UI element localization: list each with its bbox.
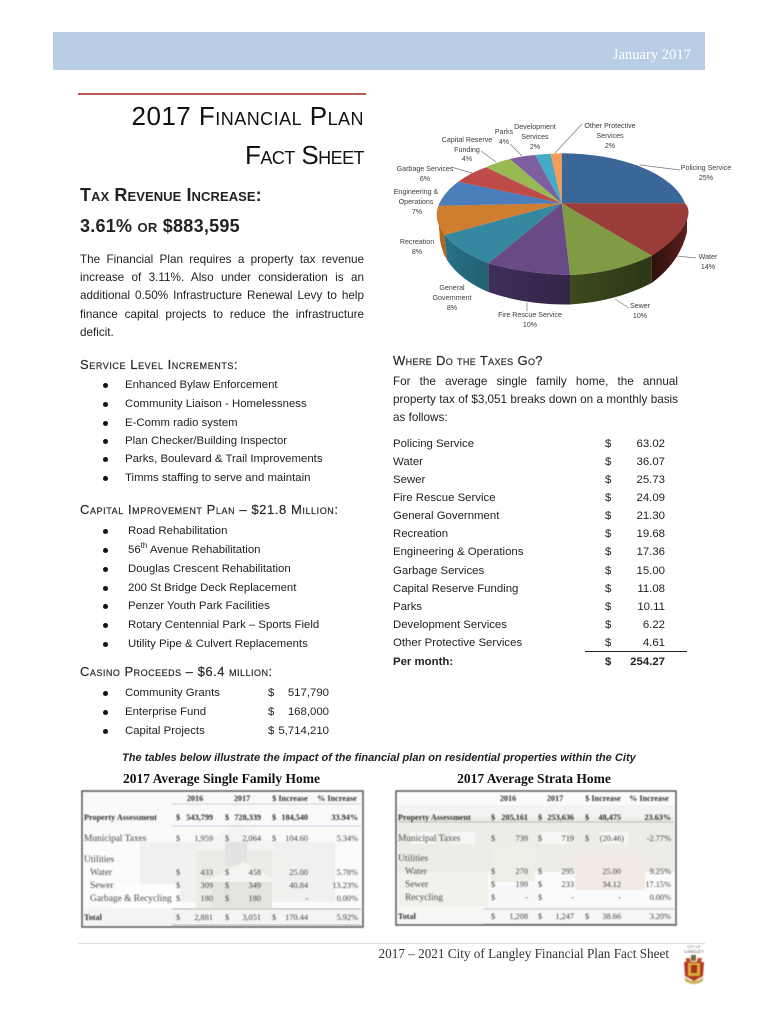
section: capital improvement plan <box>80 502 339 650</box>
table values: $ <box>491 893 495 902</box>
table values: 295 <box>562 867 574 876</box>
paragraph: financial plan: finance capital projects to reduce the infrastructure <box>80 308 364 321</box>
chart labels: 6% <box>420 175 431 183</box>
table values: 2017 <box>547 794 563 803</box>
table values: $ <box>538 867 542 876</box>
table values: 9.25% <box>650 867 671 876</box>
table values: 349 <box>249 881 261 890</box>
table values: 33.94% <box>331 813 358 822</box>
icon: city of langley crest <box>683 945 705 985</box>
table: strata home <box>394 790 678 926</box>
table values: 34.12 <box>602 880 621 889</box>
tax breakdown table: 17.36 <box>636 546 665 558</box>
table values: $ <box>585 813 589 822</box>
chart labels: Sewer <box>630 302 651 310</box>
tax breakdown table: Engineering & Operations <box>393 546 523 558</box>
slice: garbage <box>458 167 562 203</box>
chart labels: 4% <box>462 155 473 163</box>
tax breakdown table: Policing Service <box>393 438 474 450</box>
chart labels: Water <box>699 253 718 261</box>
table values: $ <box>272 834 276 843</box>
tax breakdown table: Garbage Services <box>393 565 484 577</box>
caption: The tables below illustrate the impact of the financial plan on residential properties within the City <box>122 752 636 764</box>
list: 56th Avenue Rehabilitation <box>128 541 260 556</box>
table values: $ <box>225 913 229 922</box>
table values: 13.23% <box>332 881 358 890</box>
table values: Total <box>84 913 103 922</box>
table title: strata: 2017 Average Strata Home <box>457 771 611 786</box>
title block <box>78 93 366 175</box>
total row <box>393 656 665 668</box>
tax breakdown table: Fire Rescue Service <box>393 492 496 504</box>
table values: 5.34% <box>337 834 358 843</box>
chart labels: 8% <box>412 248 423 256</box>
table values: 2016 <box>500 794 516 803</box>
tax breakdown table: 63.02 <box>636 438 665 450</box>
pie chart: where taxes go <box>394 122 731 329</box>
slice: engineering <box>438 182 562 206</box>
chart labels: 10% <box>633 312 648 320</box>
table values: $ <box>538 880 542 889</box>
tax breakdown table: $ <box>605 546 611 558</box>
table values <box>398 794 671 921</box>
table values: 2,064 <box>242 834 262 843</box>
table values: 104.60 <box>285 834 308 843</box>
list: Enhanced Bylaw Enforcement <box>125 379 278 391</box>
list: $ <box>268 706 274 718</box>
heading: tax revenue increase <box>80 185 262 236</box>
table values: 233 <box>562 880 574 889</box>
tax breakdown table: General Government <box>393 510 499 522</box>
table values: 184,540 <box>281 813 308 822</box>
tax breakdown table: Parks <box>393 601 422 613</box>
chart labels: General <box>439 284 465 292</box>
tax breakdown table: $ <box>605 619 611 631</box>
paragraph: financial plan: increase of 3.11%. Also under consideration is an <box>80 271 364 284</box>
header rule <box>398 822 674 924</box>
slice: recreation <box>437 203 562 235</box>
table values: - <box>305 894 308 903</box>
table values: 719 <box>562 834 574 843</box>
list: Timms staffing to serve and maintain <box>125 472 310 484</box>
house photo background <box>84 792 361 926</box>
icon: city of langley crest: LANGLEY <box>684 949 704 954</box>
table values: 5.92% <box>337 913 358 922</box>
table values: $ <box>491 867 495 876</box>
list: Douglas Crescent Rehabilitation <box>128 563 291 575</box>
table values: 3.20% <box>650 912 671 921</box>
list: Penzer Youth Park Facilities <box>128 600 270 612</box>
table values: 199 <box>516 880 528 889</box>
chart labels: 7% <box>412 208 423 216</box>
intro text: For the average single family home, the annual <box>393 375 678 388</box>
tax breakdown table: $ <box>605 583 611 595</box>
table values: 205,161 <box>501 813 528 822</box>
tax breakdown table: 4.61 <box>643 637 665 649</box>
table values: 253,636 <box>547 813 574 822</box>
table values: Total <box>398 912 417 921</box>
table values: $ <box>491 880 495 889</box>
list: Enterprise Fund <box>125 706 206 718</box>
chart labels: Operations <box>399 198 434 206</box>
table values: 2017 <box>234 794 250 803</box>
chart labels: 2% <box>605 142 616 150</box>
heading: Capital Improvement Plan – $21.8 Million: <box>80 502 339 517</box>
table values: % Increase <box>629 794 669 803</box>
table values: $ <box>585 912 589 921</box>
table values: 17.15% <box>645 880 671 889</box>
tax breakdown table: 19.68 <box>636 528 665 540</box>
title line 2: Fact Sheet <box>245 140 364 170</box>
table values: $ <box>491 834 495 843</box>
table values: 458 <box>249 868 261 877</box>
heading: Where Do the Taxes Go? <box>393 353 543 368</box>
paragraph: financial plan: additional 0.50% Infrastructure Renewal Levy to help <box>80 289 364 302</box>
table values: $ <box>272 813 276 822</box>
slice: sewer <box>562 203 652 275</box>
chart labels: 2% <box>530 143 541 151</box>
table values: 543,799 <box>186 813 213 822</box>
table values: 25.00 <box>602 867 621 876</box>
chart labels: Garbage Services <box>397 165 454 173</box>
tax breakdown table: 25.73 <box>636 474 665 486</box>
chart labels: Services <box>596 132 624 140</box>
tax breakdown table: 21.30 <box>636 510 665 522</box>
tax breakdown table: Other Protective Services <box>393 637 522 649</box>
table values: $ <box>176 894 180 903</box>
table values: 0.00% <box>650 893 671 902</box>
chart labels: 14% <box>701 263 716 271</box>
table values: Utilities <box>84 855 115 865</box>
table values: $ <box>176 868 180 877</box>
slice: parks <box>510 155 562 203</box>
chart labels: Other Protective <box>584 122 636 130</box>
chart labels: Engineering & <box>394 188 439 196</box>
list <box>103 687 329 737</box>
table: single family home <box>80 790 364 928</box>
table values: 270 <box>516 867 528 876</box>
table values: % Increase <box>317 794 357 803</box>
tax breakdown table: 11.08 <box>637 583 665 595</box>
list: Rotary Centennial Park – Sports Field <box>128 619 319 631</box>
table values: $ <box>491 813 495 822</box>
footer text: 2017 – 2021 City of Langley Financial Plan Fact Sheet <box>379 946 669 961</box>
table values: 2,881 <box>194 913 213 922</box>
header band <box>53 32 705 70</box>
list: Plan Checker/Building Inspector <box>125 435 287 447</box>
list: 517,790 <box>288 687 329 699</box>
heading line 2: 3.61% or $883,595 <box>80 216 240 236</box>
header rule <box>172 804 361 925</box>
table values: $ <box>491 912 495 921</box>
slice: development <box>535 154 562 203</box>
tax breakdown table: 15.00 <box>636 565 665 577</box>
list: 200 St Bridge Deck Replacement <box>128 582 296 594</box>
slice: general government <box>444 203 562 263</box>
table values: Garbage & Recycling <box>90 894 172 904</box>
table values: - <box>525 893 528 902</box>
tax breakdown table: $ <box>605 565 611 577</box>
table values: 180 <box>201 894 213 903</box>
chart labels: Parks <box>495 128 514 136</box>
chart labels: Capital Reserve <box>442 136 492 144</box>
section: casino proceeds <box>80 664 329 737</box>
table values: (20.46) <box>600 834 624 843</box>
slice: fire rescue <box>488 203 570 275</box>
table values: 40.84 <box>289 881 309 890</box>
list: Utility Pipe & Culvert Replacements <box>128 638 308 650</box>
table values: - <box>618 893 621 902</box>
table values: Municipal Taxes <box>84 834 147 844</box>
table values: $ Increase <box>272 794 308 803</box>
table values: 1,208 <box>509 912 528 921</box>
table values: 38.66 <box>602 912 621 921</box>
chart labels: Services <box>521 133 549 141</box>
tax breakdown table: Recreation <box>393 528 448 540</box>
table values: 309 <box>201 881 213 890</box>
slice: policing <box>562 153 685 203</box>
table values: $ <box>585 834 589 843</box>
list: Capital Projects <box>125 725 205 737</box>
chart labels: 4% <box>499 138 510 146</box>
section: where do the taxes go <box>393 353 687 668</box>
tax breakdown table <box>393 438 687 668</box>
table values: $ <box>176 834 180 843</box>
table values: 170.44 <box>285 913 309 922</box>
tax breakdown table: 36.07 <box>636 456 665 468</box>
table values: 5.78% <box>337 868 358 877</box>
table values: $ <box>225 834 229 843</box>
tax breakdown table: Water <box>393 456 423 468</box>
table values: $ <box>225 881 229 890</box>
tax breakdown table: $ <box>605 510 611 522</box>
icon: city of langley crest: CITY OF <box>687 945 701 949</box>
total row: Per month: <box>393 656 453 668</box>
intro text: property tax of $3,051 breaks down on a monthly basis <box>393 393 678 406</box>
tax breakdown table: $ <box>605 456 611 468</box>
paragraph: financial plan: The Financial Plan requires a property tax revenue <box>80 253 364 266</box>
table values: $ Increase <box>585 794 621 803</box>
tax breakdown table: $ <box>605 601 611 613</box>
table values: Sewer <box>90 881 114 891</box>
table values: 23.63% <box>644 813 671 822</box>
total row: 254.27 <box>630 656 665 668</box>
tax breakdown table: Sewer <box>393 474 425 486</box>
tax breakdown table: Development Services <box>393 619 507 631</box>
chart labels: 25% <box>699 174 714 182</box>
list: 168,000 <box>288 706 329 718</box>
section: service level increments <box>80 357 323 484</box>
title line 1: 2017 Financial Plan <box>132 101 364 131</box>
tax breakdown table: Capital Reserve Funding <box>393 583 518 595</box>
pie top slices <box>437 153 689 275</box>
table values: $ <box>272 913 276 922</box>
chart labels: 10% <box>523 321 538 329</box>
chart labels: Development <box>514 123 556 131</box>
tax breakdown table: 24.09 <box>636 492 665 504</box>
table values: 0.00% <box>337 894 358 903</box>
table values: 48,475 <box>598 813 621 822</box>
total row: $ <box>605 656 611 668</box>
list: 5,714,210 <box>278 725 329 737</box>
list <box>103 525 319 650</box>
table values: Property Assessment <box>398 813 471 822</box>
table values: Water <box>90 868 113 878</box>
date: January 2017 <box>613 47 691 63</box>
chart labels: Recreation <box>400 238 434 246</box>
tax breakdown table: $ <box>605 474 611 486</box>
table values: 25.00 <box>289 868 308 877</box>
list: Community Grants <box>125 687 220 699</box>
tax breakdown table: 6.22 <box>643 619 665 631</box>
slice: water <box>562 203 689 256</box>
list: Road Rehabilitation <box>128 525 227 537</box>
chart labels: 8% <box>447 304 458 312</box>
chart labels: Government <box>432 294 472 302</box>
chart labels <box>394 122 731 329</box>
table values: $ <box>225 868 229 877</box>
tax breakdown table: $ <box>605 637 611 649</box>
table values: $ <box>176 913 180 922</box>
heading: Service Level Increments: <box>80 357 238 372</box>
list: Parks, Boulevard & Trail Improvements <box>125 453 323 465</box>
table values: $ <box>538 912 542 921</box>
heading line 1: Tax Revenue Increase: <box>80 185 262 205</box>
table values: -2.77% <box>647 834 671 843</box>
table values: 433 <box>201 868 213 877</box>
table values: 180 <box>249 894 261 903</box>
leader lines <box>451 124 696 311</box>
intro text <box>393 375 678 424</box>
table values: Recycling <box>405 893 443 903</box>
table values <box>84 794 358 922</box>
table title: single family: 2017 Average Single Family Home <box>123 771 320 786</box>
list: $ <box>268 725 274 737</box>
table values: $ <box>225 894 229 903</box>
strata building photo background <box>398 805 674 924</box>
table values: 2016 <box>187 794 203 803</box>
tax breakdown table: $ <box>605 528 611 540</box>
table values: $ <box>176 813 180 822</box>
chart labels: Policing Service <box>681 164 731 172</box>
table values: Utilities <box>398 854 429 864</box>
heading: Casino Proceeds – $6.4 million: <box>80 664 273 679</box>
table values: 3,051 <box>242 913 261 922</box>
table values: 739 <box>516 834 528 843</box>
list: E-Comm radio system <box>125 417 238 429</box>
list: Community Liaison - Homelessness <box>125 398 307 410</box>
table values: - <box>571 893 574 902</box>
paragraph: financial plan <box>80 253 364 339</box>
list <box>103 379 323 484</box>
table values: 1,959 <box>194 834 213 843</box>
paragraph: financial plan: deficit. <box>80 326 114 339</box>
table values: Municipal Taxes <box>398 834 461 844</box>
slice: capital reserve <box>486 159 562 203</box>
table values: 728,339 <box>234 813 261 822</box>
slice: other protective <box>551 153 562 203</box>
tax breakdown table: 10.11 <box>637 601 665 613</box>
list: $ <box>268 687 274 699</box>
table values: Water <box>405 867 428 877</box>
table values: $ <box>176 881 180 890</box>
intro text: as follows: <box>393 411 448 424</box>
pie side walls <box>438 208 687 305</box>
table values: $ <box>225 813 229 822</box>
table values: $ <box>538 834 542 843</box>
table values: Property Assessment <box>84 813 157 822</box>
table values: $ <box>538 893 542 902</box>
chart labels: Funding <box>454 146 480 154</box>
table values: 1,247 <box>555 912 574 921</box>
tax breakdown table: $ <box>605 492 611 504</box>
table values: Sewer <box>405 880 429 890</box>
tax breakdown table: $ <box>605 438 611 450</box>
table values: $ <box>538 813 542 822</box>
chart labels: Fire Rescue Service <box>498 311 562 319</box>
